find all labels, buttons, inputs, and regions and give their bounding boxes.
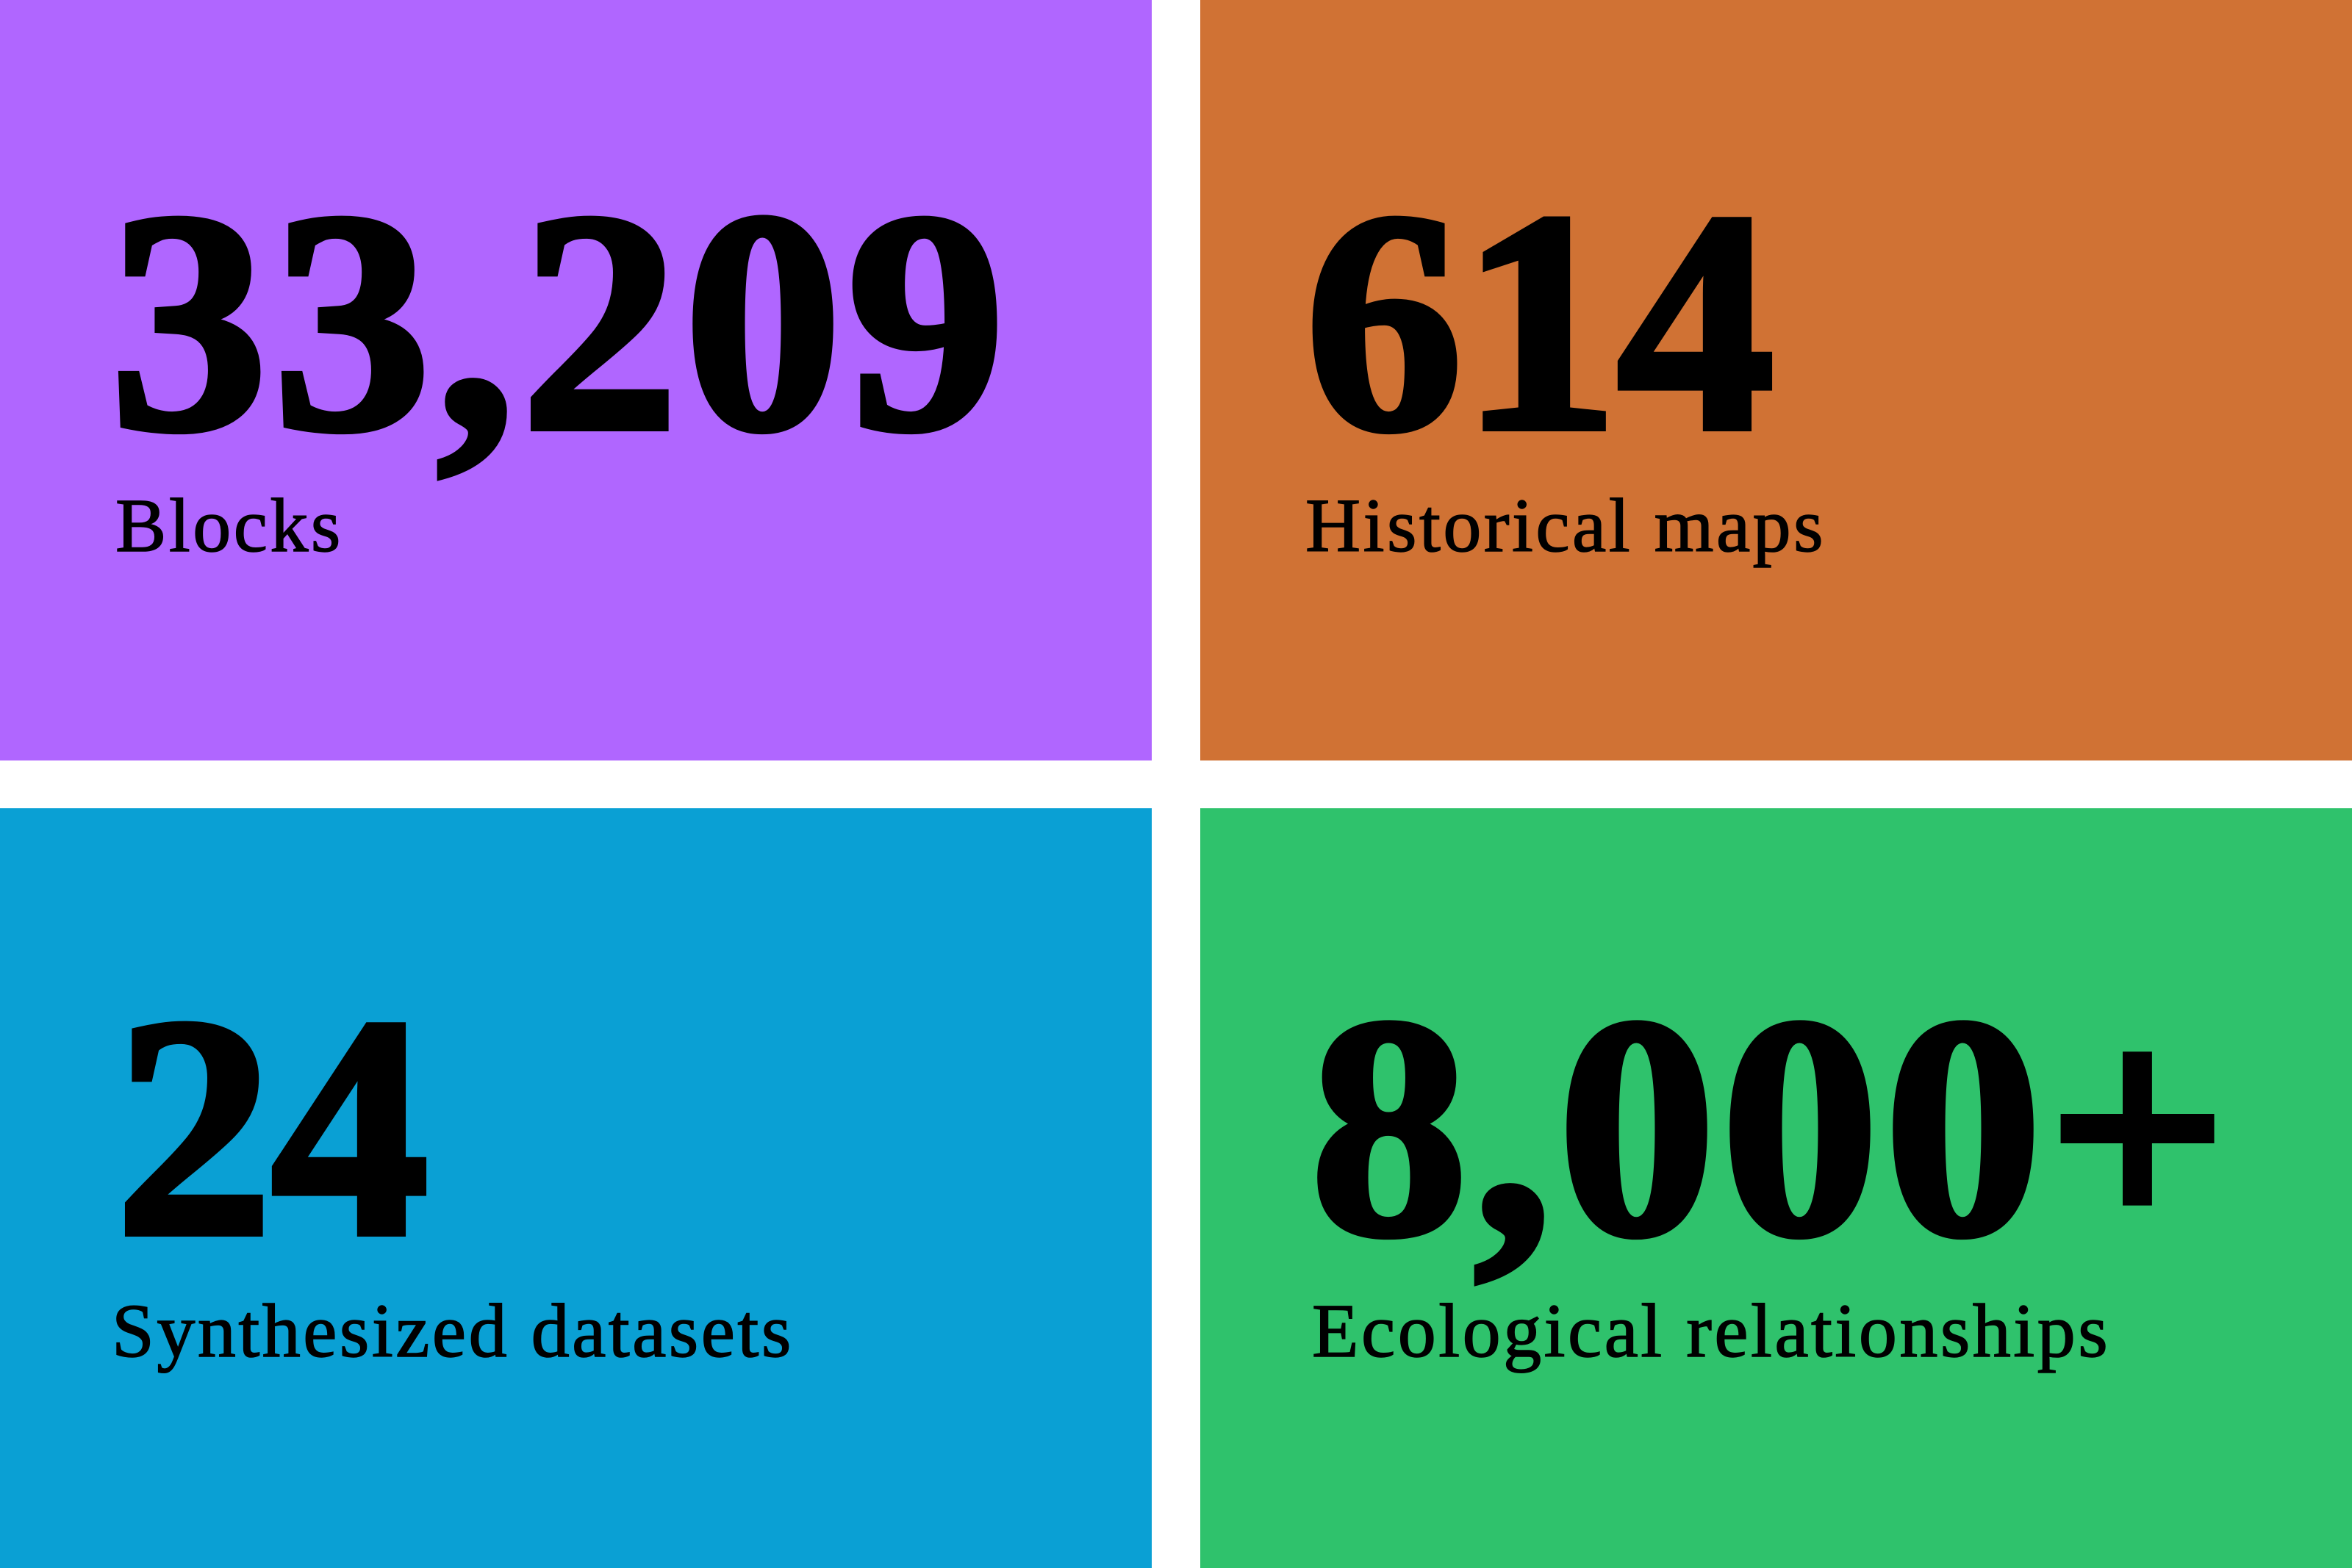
number: 8,000+: 8,000+ [1311,953,2233,1301]
label: Ecological relationships: Ecological relationships [1312,1289,2110,1373]
label: Synthesized datasets: Synthesized datasets [112,1289,794,1373]
panel: synthesized datasets [0,808,1152,1568]
label: Historical maps: Historical maps [1305,483,1826,568]
number: 33,209: 33,209 [110,148,1011,496]
number: 614: 614 [1305,148,1773,496]
label: Blocks: Blocks [115,483,343,568]
panel: historical maps [1200,0,2352,760]
panel: blocks [0,0,1152,760]
panel: ecological relationships [1200,808,2352,1568]
number: 24: 24 [115,953,427,1301]
